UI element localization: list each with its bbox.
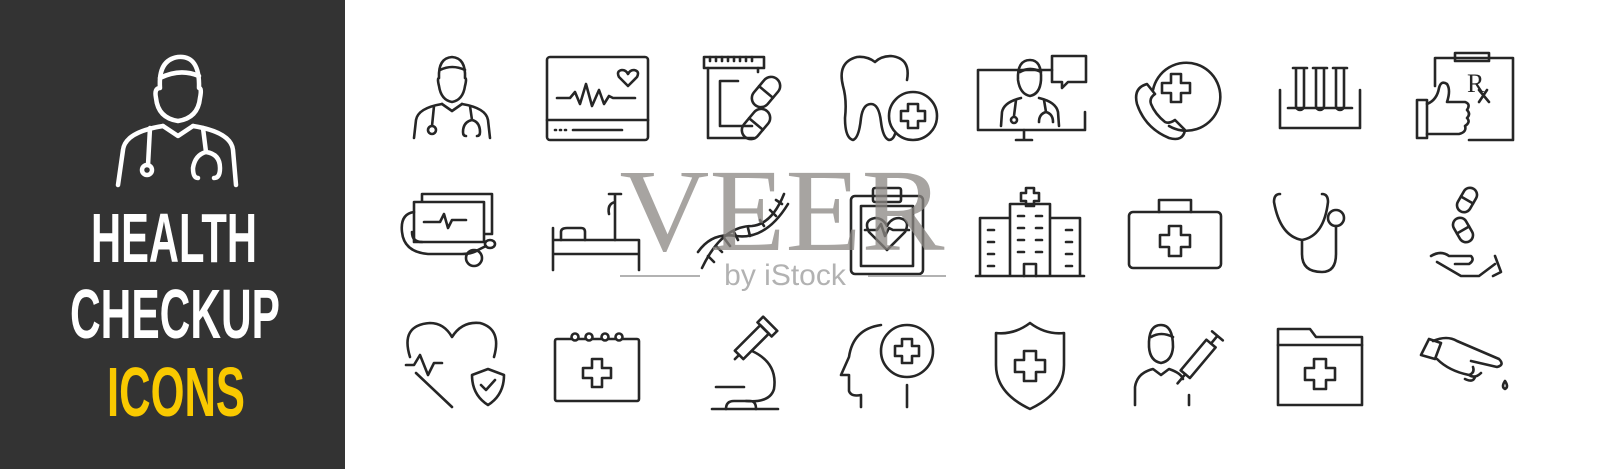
icon: first aid kit — [1129, 200, 1221, 268]
icon: blood pressure — [402, 194, 495, 266]
heading: ICONS: ICONS — [107, 353, 245, 431]
panel: left dark title panel — [0, 0, 345, 469]
icon: prescription thumbs up: R — [1467, 69, 1485, 98]
icon grid — [402, 53, 1513, 409]
icon: doctor white — [118, 57, 236, 185]
icon: heart shield — [406, 323, 504, 407]
icon: tooth plus — [842, 56, 937, 140]
icon: microscope — [712, 317, 778, 409]
icon: medical folder — [1278, 329, 1362, 405]
icon: finger blood drop — [1421, 338, 1507, 389]
icon: prescription thumbs up — [1417, 53, 1513, 140]
icon: pill bottle — [704, 57, 784, 143]
icon: head plus — [841, 325, 933, 407]
icon: clipboard heart — [851, 188, 923, 274]
icon: online doctor — [978, 56, 1086, 140]
icon: heart monitor — [547, 57, 648, 140]
icon: vaccination — [1135, 325, 1223, 405]
heading: HEALTH: HEALTH — [91, 199, 257, 277]
icon: shield plus — [996, 323, 1064, 409]
icon: DNA — [698, 194, 788, 268]
icon: phone plus — [1136, 63, 1220, 139]
icon: hospital building — [976, 188, 1084, 276]
icon: pills hand — [1431, 185, 1501, 276]
icon: hospital bed — [553, 194, 639, 270]
icon: test tubes — [1280, 68, 1360, 128]
watermark: VEER by iStock: by iStock — [724, 259, 847, 292]
heading: CHECKUP: CHECKUP — [70, 275, 280, 353]
icon: calendar plus — [555, 334, 639, 401]
watermark: VEER by iStock: VEER — [620, 145, 945, 276]
icon: doctor — [414, 57, 490, 138]
icon: stethoscope — [1274, 194, 1344, 272]
